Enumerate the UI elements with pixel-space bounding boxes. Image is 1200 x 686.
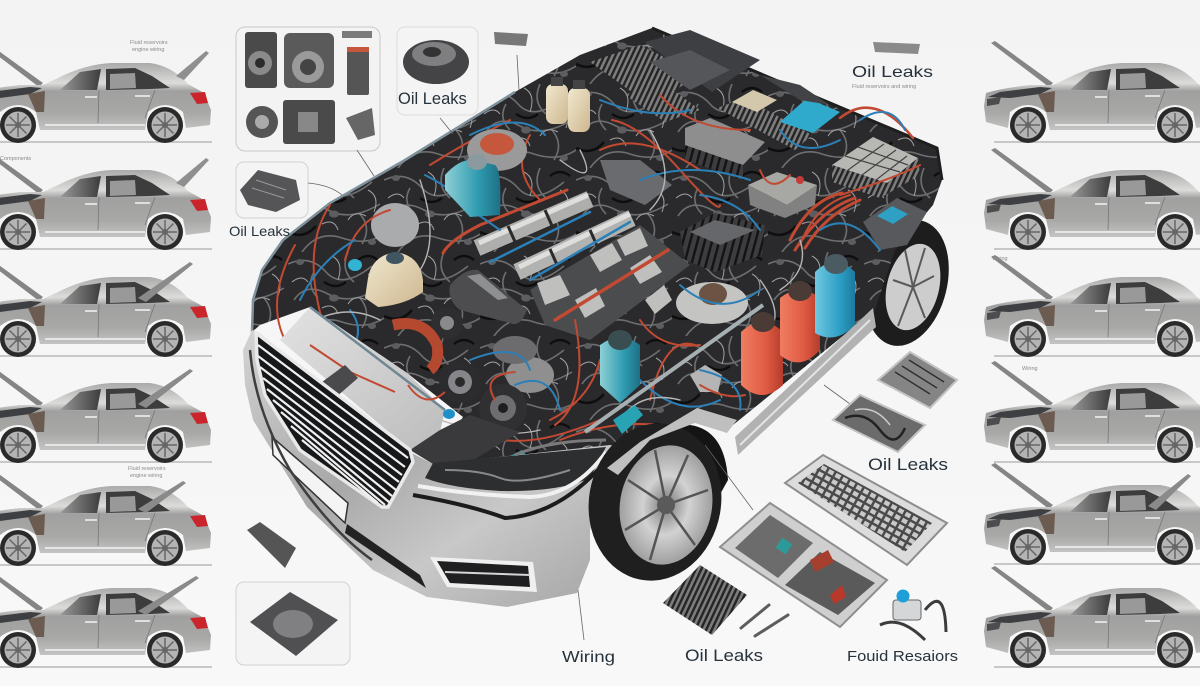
plate bbox=[272, 437, 348, 523]
lower bumper black strip bbox=[345, 524, 426, 588]
reservoir: teal lower bbox=[600, 330, 640, 403]
inset panel: components grid bbox=[236, 27, 380, 151]
reservoir: cream large bbox=[365, 252, 423, 307]
car: left row 3 bbox=[0, 255, 212, 357]
car: left row 6 bbox=[0, 566, 212, 668]
inset panel: engine block bbox=[236, 162, 308, 218]
main car: engine bay bbox=[252, 28, 942, 468]
bay floor bbox=[252, 28, 942, 464]
car: right row 3 bbox=[984, 255, 1200, 357]
lower intake bbox=[430, 557, 537, 592]
reservoir: teal upper bbox=[445, 154, 500, 217]
rear silver disc bbox=[676, 282, 748, 324]
label: wiring: Wiring bbox=[562, 649, 615, 666]
leader lines bbox=[308, 55, 872, 640]
small captions near side cars: Fluid reservoirs bbox=[130, 40, 168, 46]
small captions near side cars: engine wiring bbox=[130, 473, 162, 479]
tube highlights bbox=[479, 195, 630, 267]
pulleys bbox=[431, 307, 554, 432]
fluid reservoirs bbox=[348, 77, 855, 403]
label: oil leaks top inset: Oil Leaks bbox=[398, 90, 467, 108]
fender strip bbox=[607, 408, 737, 475]
bay rear rim bbox=[652, 28, 942, 180]
car: right row 1 bbox=[984, 41, 1200, 143]
car: left row 5 bbox=[0, 464, 212, 566]
right column of side-view cars bbox=[984, 41, 1200, 668]
inset panel: lower-left plate bbox=[236, 582, 350, 665]
part tray: double compartment bbox=[720, 503, 887, 627]
small captions near side cars: Components bbox=[0, 156, 31, 162]
label: oil leaks left: Oil Leaks bbox=[229, 223, 290, 239]
part: top right connector bbox=[873, 42, 920, 54]
small captions near side cars: Fluid reservoirs bbox=[128, 466, 166, 472]
band above headlight bbox=[515, 440, 606, 455]
wiring cluster by headlight bbox=[410, 415, 520, 464]
silver housing bbox=[371, 203, 419, 247]
headlight bbox=[413, 447, 607, 518]
tube collars bbox=[508, 210, 598, 267]
car: left row 4 bbox=[0, 361, 212, 463]
part: radiator module bbox=[663, 565, 747, 635]
part tray: upper module bbox=[878, 352, 957, 408]
car: right row 6 bbox=[984, 566, 1200, 668]
sill highlight bbox=[740, 320, 870, 445]
part tray: keyboard-like module bbox=[785, 455, 947, 565]
left column of side-view cars bbox=[0, 41, 212, 668]
rear-side modules bbox=[590, 30, 927, 272]
support panel wiring bbox=[310, 345, 445, 400]
label: oil leaks top right: Oil Leaks bbox=[852, 64, 933, 81]
label: oil leaks bottom: Oil Leaks bbox=[685, 646, 763, 665]
small captions near side cars: Fluid reservoirs bbox=[400, 110, 438, 116]
label: oil leaks right: Oil Leaks bbox=[868, 456, 948, 474]
support bar edge bbox=[310, 307, 445, 410]
metal block bbox=[690, 365, 722, 392]
grille bbox=[256, 333, 413, 507]
lower rocker blocks bbox=[537, 228, 672, 318]
support bracket bbox=[322, 365, 358, 398]
blue clip bbox=[443, 409, 455, 419]
reservoir: red cap dome bbox=[467, 129, 527, 171]
blue cap bbox=[348, 259, 362, 271]
reservoir: small cream pair bbox=[546, 77, 590, 132]
car: right row 2 bbox=[984, 148, 1200, 250]
front wheel bbox=[576, 413, 734, 591]
inset panel: turbine part bbox=[397, 27, 478, 115]
radiator support panel bbox=[280, 307, 445, 450]
small captions near side cars bbox=[0, 40, 1038, 479]
body shell bbox=[243, 330, 640, 607]
red coil hose bbox=[393, 324, 438, 370]
small captions near side cars: Fluid reservoirs and wiring bbox=[852, 84, 916, 90]
part: fluid pump bbox=[880, 590, 946, 640]
main car: rear wheel bbox=[853, 211, 961, 355]
label: fluid reservoirs: Fouid Resaiors bbox=[847, 648, 958, 665]
part: tools bbox=[741, 605, 788, 636]
inner fender bar bbox=[585, 305, 763, 432]
small captions near side cars: Wiring bbox=[1022, 366, 1038, 372]
part: lower-left bracket bbox=[247, 522, 296, 568]
part tray: wiring module bbox=[833, 395, 925, 452]
reservoir: blue bbox=[815, 254, 855, 338]
reservoir: red rear bbox=[780, 281, 820, 362]
engine block bbox=[371, 195, 748, 432]
main car: front body bbox=[243, 307, 737, 607]
outer edge dark line bbox=[250, 350, 372, 560]
car: left row 1 bbox=[0, 41, 212, 143]
part: top connector strip bbox=[494, 32, 528, 46]
rocker base bbox=[530, 225, 690, 340]
valve tubes bbox=[477, 199, 590, 248]
car: left row 2 bbox=[0, 148, 212, 250]
small captions near side cars: Wiring bbox=[992, 256, 1008, 262]
teal mesh patches bbox=[510, 405, 643, 468]
reservoir: red front bbox=[741, 312, 783, 395]
car: right row 5 bbox=[984, 463, 1200, 565]
small captions near side cars: engine wiring bbox=[132, 47, 164, 53]
wires bbox=[277, 95, 920, 441]
engine cover bbox=[449, 270, 527, 324]
car: right row 4 bbox=[984, 361, 1200, 463]
bay rim highlight bbox=[252, 92, 515, 332]
main car: side sill bbox=[735, 308, 876, 455]
